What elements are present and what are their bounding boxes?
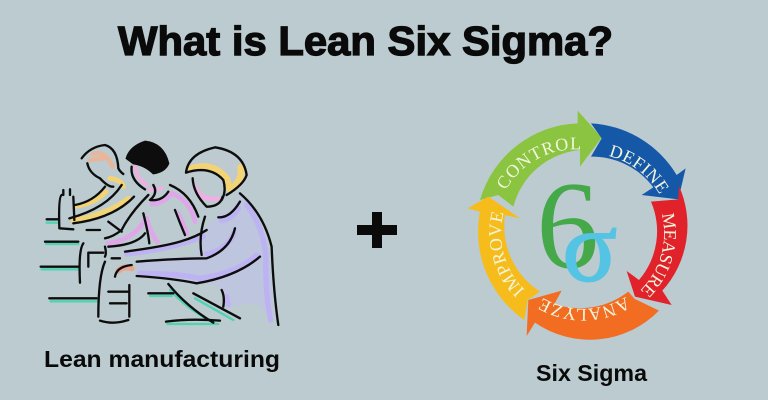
bottles xyxy=(59,189,129,323)
colour washes on workers xyxy=(42,153,275,324)
middle worker xyxy=(105,142,198,247)
arrow: improve xyxy=(468,196,540,320)
back worker xyxy=(69,145,134,232)
front worker xyxy=(112,147,278,325)
arrow: measure xyxy=(626,186,688,305)
six sigma cycle xyxy=(468,110,688,340)
sigma symbol: σ xyxy=(562,190,617,303)
arrow: improve: IMPROVE xyxy=(489,212,524,298)
plus sign xyxy=(357,212,397,248)
arrow: define xyxy=(591,123,686,200)
arrow: control xyxy=(480,110,602,206)
arrow: analyze xyxy=(526,290,659,340)
illustration: lean manufacturing workers xyxy=(41,142,278,325)
arrow: control: CONTROL xyxy=(498,138,580,188)
arrow: analyze: ANALYZE xyxy=(538,297,626,321)
arrow: define: DEFINE xyxy=(608,144,669,194)
label: six sigma: Six Sigma xyxy=(536,360,647,386)
arrow: measure: MEASURE xyxy=(640,212,676,298)
label: lean manufacturing: Lean manufacturing xyxy=(44,346,280,372)
title: What is Lean Six Sigma? xyxy=(118,18,613,64)
workbench lines xyxy=(41,219,220,322)
six symbol: 6 xyxy=(536,157,599,295)
